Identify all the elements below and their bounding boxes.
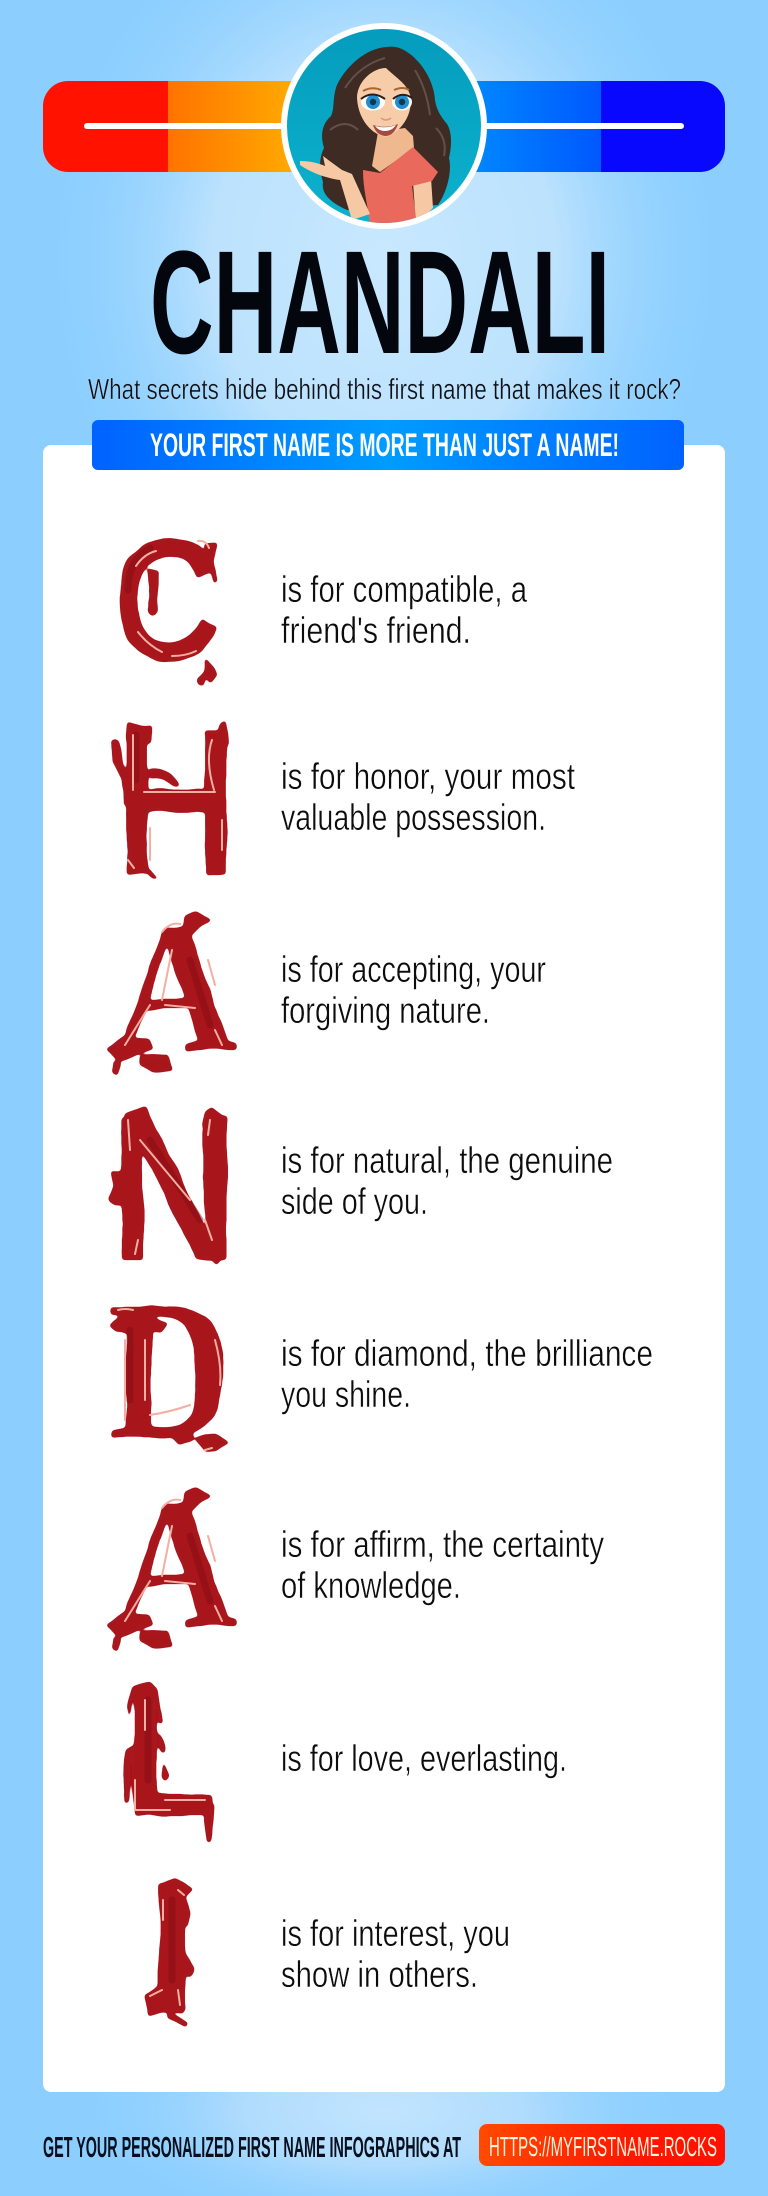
right arm [413, 181, 433, 218]
text: H line: is for honor, your most [281, 756, 576, 797]
text: I line: show in others. [281, 1954, 478, 1995]
letter N: N [109, 1073, 238, 1305]
eyes [361, 94, 385, 110]
avatar portrait [281, 23, 487, 229]
letter D: D [109, 1260, 232, 1480]
letter A: A [113, 1459, 238, 1668]
header colour bar [43, 81, 725, 172]
letter I: I [147, 1845, 198, 2049]
text: N line: is for natural, the genuine [281, 1140, 613, 1181]
text: A line: is for accepting, your [281, 949, 546, 990]
white content panel [43, 445, 725, 2092]
text: A line [281, 949, 546, 1031]
left arm and hand [300, 156, 370, 220]
nose [381, 118, 391, 120]
text: N line [281, 1140, 613, 1222]
text: A line [281, 1524, 604, 1606]
text: D line: you shine. [281, 1374, 411, 1415]
text: N line: side of you. [281, 1181, 428, 1222]
letter H: H [116, 692, 237, 913]
text: L line: is for love, everlasting. [281, 1738, 567, 1779]
letter L: L [123, 1650, 218, 1855]
face [357, 68, 411, 137]
shirt [363, 147, 438, 226]
footer url button [479, 2124, 725, 2166]
text: C line: friend's friend. [281, 610, 471, 651]
text: H line: valuable possession. [281, 797, 546, 838]
hair [320, 47, 451, 210]
mouth [373, 124, 398, 136]
eyebrows [363, 88, 409, 91]
text: A line: is for affirm, the certainty [281, 1524, 604, 1565]
text: D line [281, 1333, 653, 1415]
letter C: C [114, 507, 219, 693]
neck [372, 128, 414, 172]
banner [92, 420, 684, 470]
text: I line: is for interest, you [281, 1913, 510, 1954]
text: A line: of knowledge. [281, 1565, 461, 1606]
text: H line [281, 756, 576, 838]
text: I line [281, 1913, 510, 1995]
text: A line: forgiving nature. [281, 990, 490, 1031]
letter A: A [113, 883, 238, 1092]
text: D line: is for diamond, the brilliance [281, 1333, 653, 1374]
text: C line: is for compatible, a [281, 569, 527, 610]
hair highlights [330, 58, 445, 156]
text: C line [281, 569, 527, 651]
